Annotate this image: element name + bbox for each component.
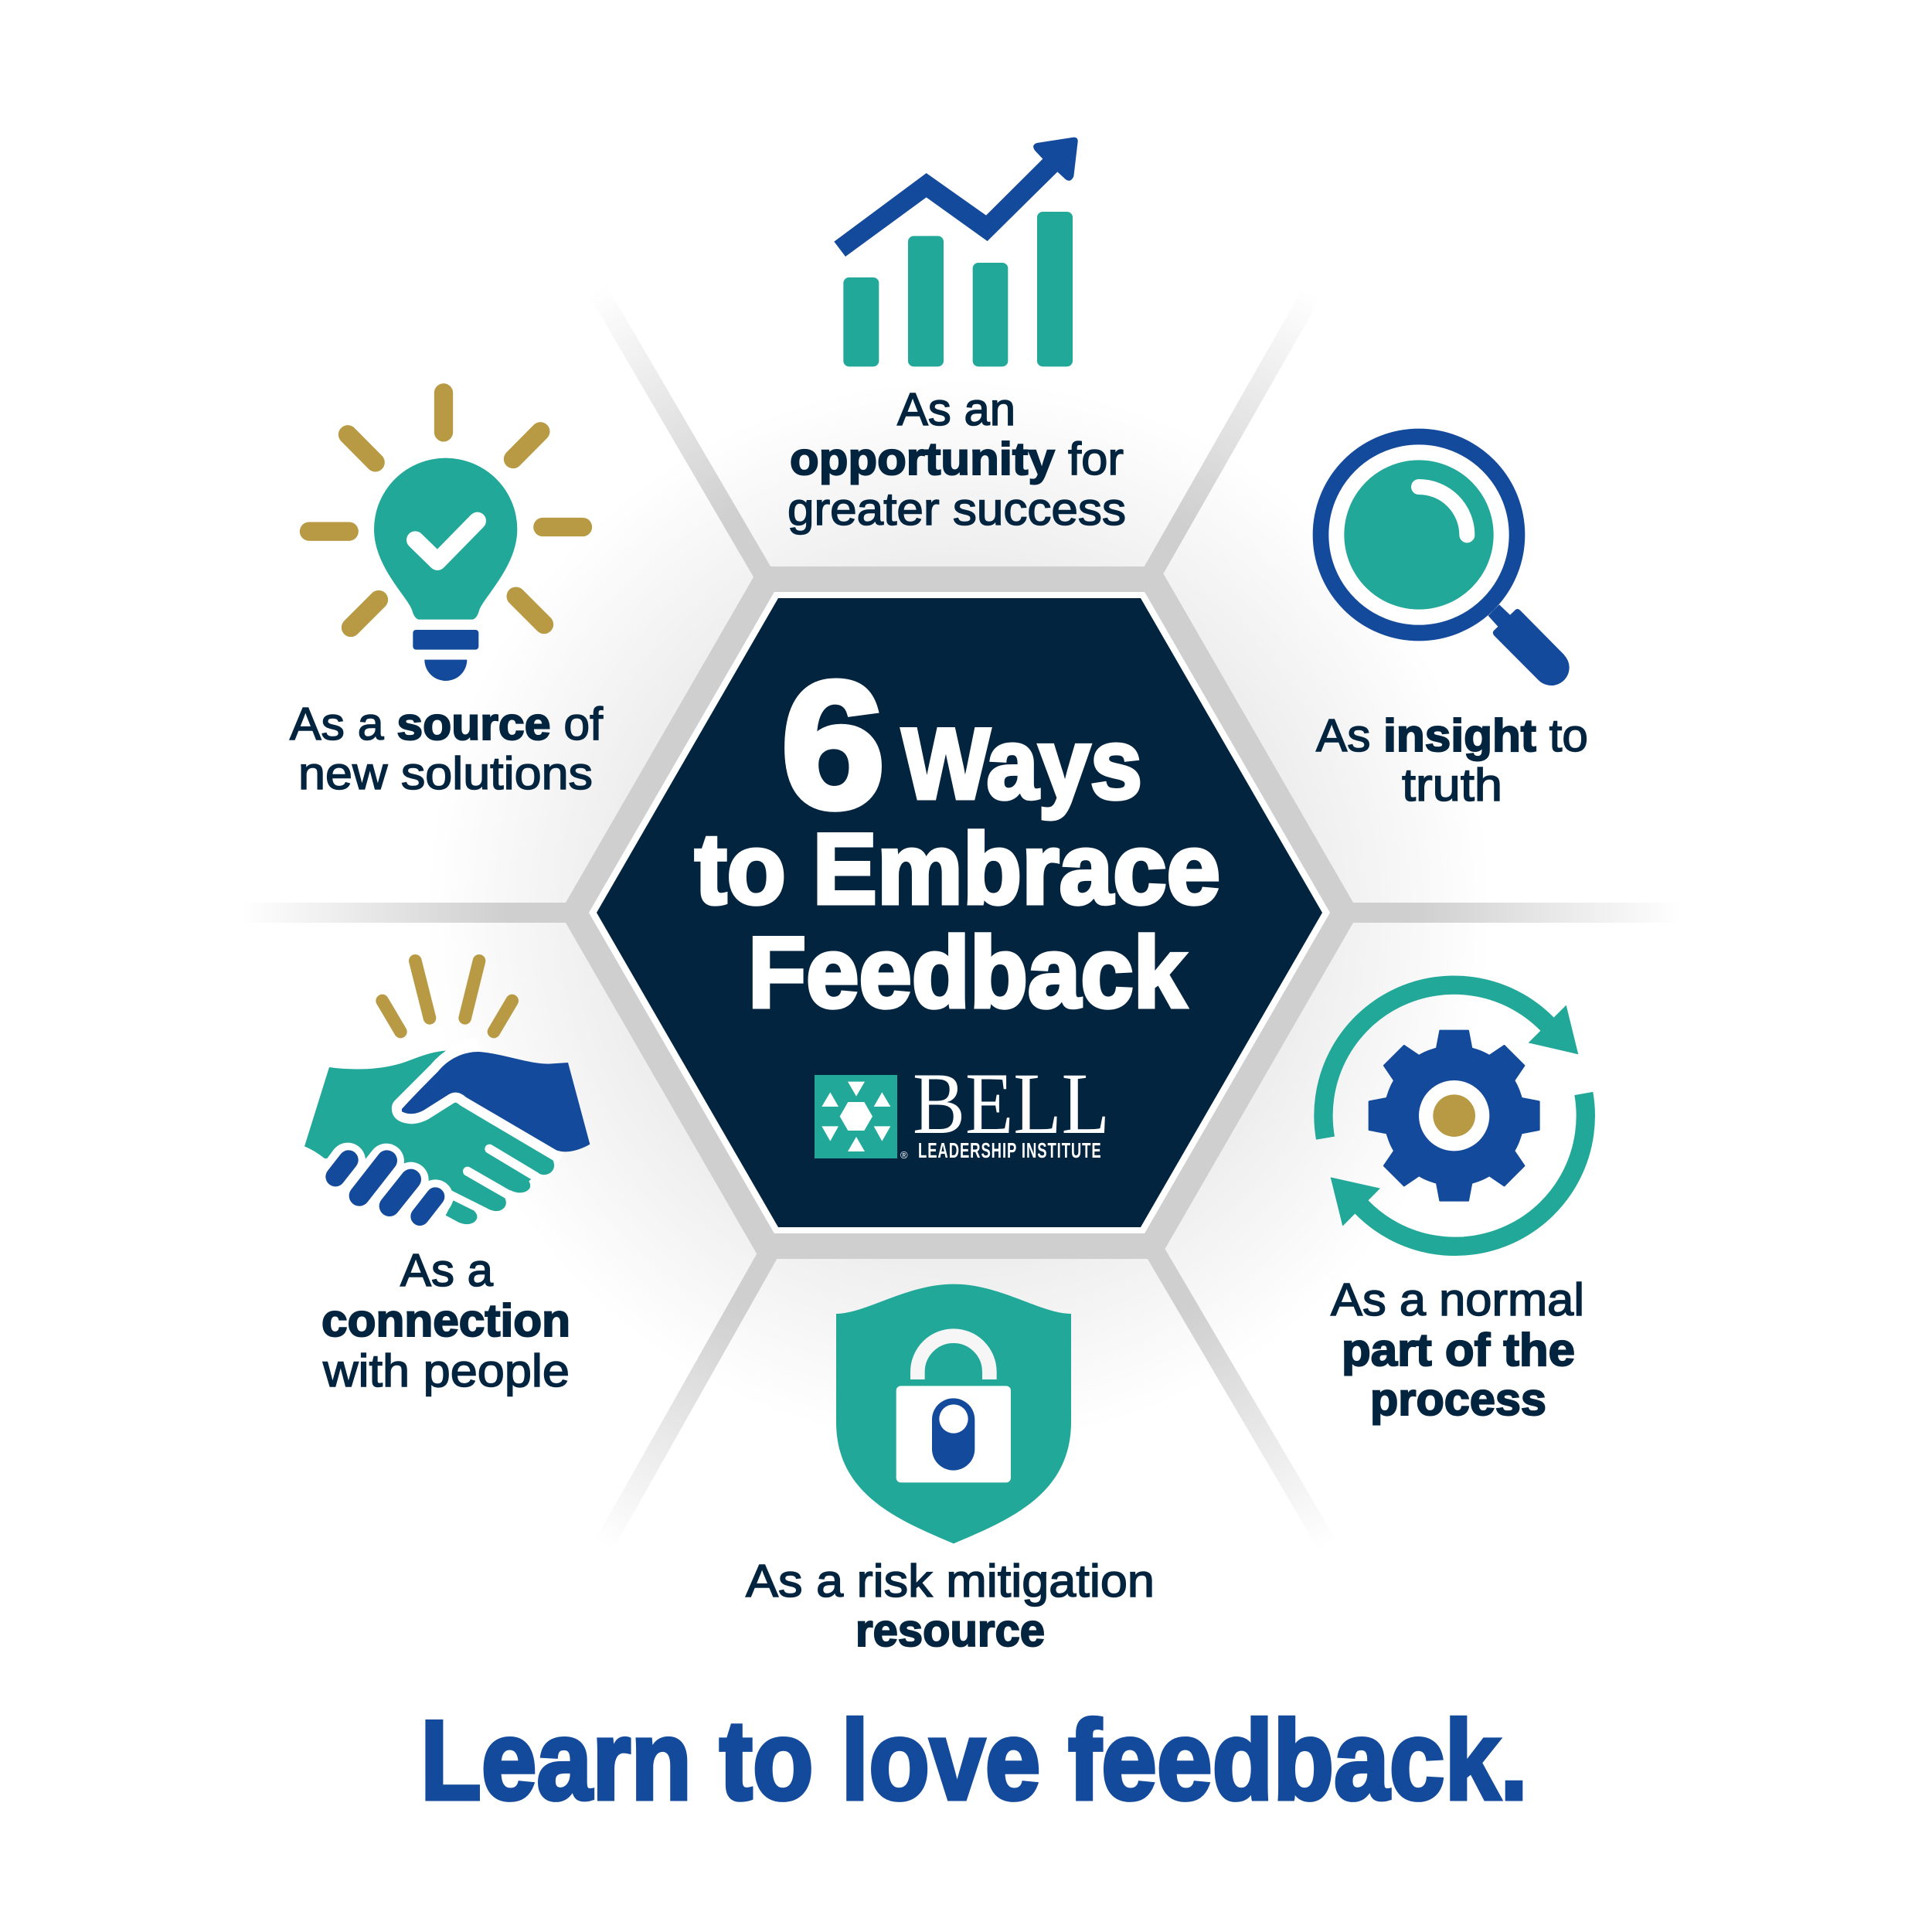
- text: process: As a normal: [1331, 1274, 1584, 1325]
- item: process: [1323, 985, 1586, 1425]
- text: risk mitigation: [746, 1556, 1155, 1656]
- hexagon grey band: [575, 580, 1345, 1246]
- icon: rising bar chart: [834, 138, 1078, 366]
- item: insight: [1316, 437, 1588, 811]
- central hexagon: [589, 592, 1330, 1233]
- text: opportunity: greater success: [787, 484, 1126, 535]
- text: connection: connection: [321, 1295, 570, 1346]
- text: risk mitigation: resource: [855, 1605, 1045, 1656]
- icon: handshake: [304, 961, 590, 1224]
- icon: shield with padlock: [836, 1284, 1071, 1543]
- icon: gear with cycle arrows: [1323, 985, 1586, 1247]
- title: to Embrace: [695, 812, 1220, 925]
- text: source: new solutions: [298, 748, 593, 799]
- logo: Bell Leadership Institute: ®: [900, 1149, 908, 1161]
- item: source: [290, 393, 604, 799]
- title: Ways: [902, 707, 1142, 820]
- icon: magnifying glass: [1321, 437, 1570, 685]
- title: Feedback: [748, 916, 1187, 1029]
- text: opportunity: [787, 384, 1126, 535]
- logo: Bell Leadership Institute: [815, 1056, 1110, 1162]
- item: opportunity: [787, 138, 1126, 535]
- text: opportunity: As an: [897, 384, 1015, 435]
- text: connection: with people: [322, 1345, 570, 1396]
- icon: light bulb with check: [309, 393, 583, 681]
- text: process: part of the: [1342, 1325, 1575, 1376]
- text: connection: [321, 1245, 570, 1396]
- background glow: [426, 379, 1492, 1446]
- item: risk mitigation: [746, 1284, 1155, 1656]
- logo: Bell Leadership Institute: LEADERSHIP INSTITUTE: [918, 1138, 1102, 1162]
- text: risk mitigation: As a risk mitigation: [746, 1556, 1155, 1607]
- text: insight: [1316, 710, 1588, 811]
- text: insight: As insight to: [1316, 710, 1588, 761]
- text: source: As a source of: [290, 699, 604, 750]
- tagline: Learn to love feedback.: [420, 1697, 1528, 1823]
- hexagon spokes: [240, 290, 1682, 1546]
- text: source: [290, 699, 604, 799]
- logo: Bell Leadership Institute: BELL: [913, 1056, 1110, 1152]
- text: insight: truth: [1402, 760, 1502, 811]
- title: [695, 645, 1220, 1029]
- item: connection: [304, 961, 590, 1396]
- text: process: process: [1370, 1374, 1546, 1425]
- text: connection: As a: [400, 1245, 493, 1296]
- title: 6: [781, 645, 885, 845]
- text: opportunity: opportunity for: [790, 434, 1124, 485]
- text: process: [1331, 1274, 1584, 1425]
